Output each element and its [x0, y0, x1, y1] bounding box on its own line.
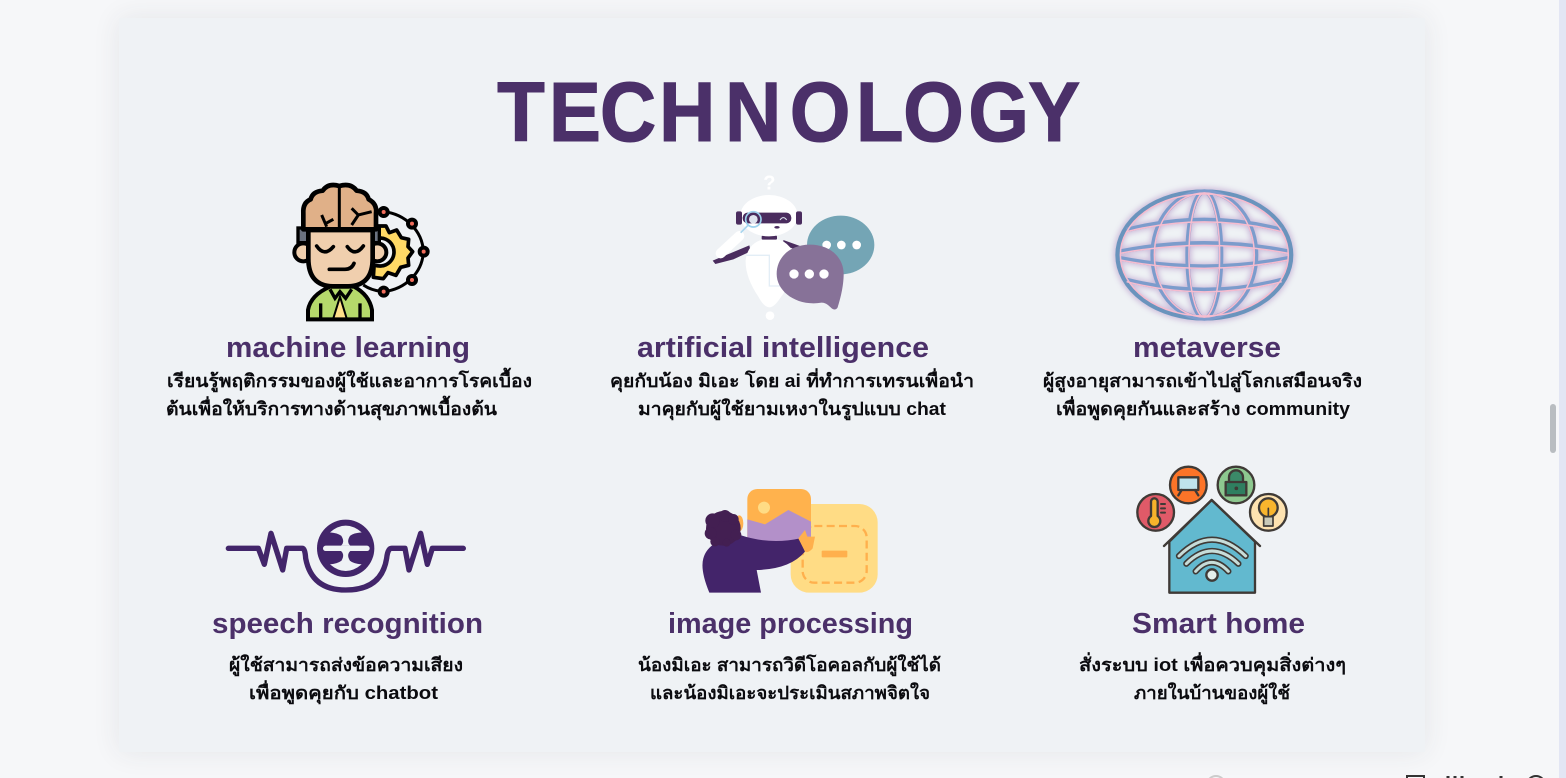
- description: smart home: สั่งระบบ iot เพื่อควบคุมสิ่งต่างๆ: [1079, 652, 1346, 677]
- heading: image processing: image processing: [668, 608, 913, 640]
- description: image processing: [638, 654, 941, 703]
- icon: smart home: [1137, 467, 1287, 593]
- icon: robot with chat bubbles: [713, 172, 874, 320]
- heading: machine learning: machine learning: [226, 332, 470, 364]
- description: smart home: [1079, 652, 1346, 705]
- heading: metaverse: metaverse: [1133, 332, 1281, 364]
- description: speech recognition: ผู้ใช้สามารถส่งข้อความเสียง: [229, 654, 463, 677]
- panel: technology card: [119, 18, 1425, 752]
- description: artificial intelligence: มาคุยกับผู้ใช้ยามเหงาในรูปแบบ chat: [638, 398, 946, 421]
- description: metaverse: ผู้สูงอายุสามารถเข้าไปสู่โลกเสมือนจริง: [1043, 370, 1362, 393]
- description: machine learning: ต้นเพื่อให้บริการทางด้านสุขภาพเบื้องต้น: [166, 395, 498, 421]
- description: speech recognition: [229, 654, 463, 705]
- title: TECHNOLOGY: [497, 66, 1080, 160]
- icon: metaverse wireframe globe: [1118, 192, 1291, 318]
- description: image processing: และน้องมิเอะจะประเมินสภาพจิตใจ: [650, 682, 930, 703]
- icon: speech waveform: [228, 520, 463, 590]
- description: smart home: ภายในบ้านของผู้ใช้: [1134, 682, 1290, 705]
- toolbar icons cropped at the bottom edge: [1207, 776, 1545, 778]
- description: metaverse: เพื่อพูดคุยกันและสร้าง community: [1056, 396, 1350, 421]
- scrollbar: [1550, 0, 1566, 778]
- description: metaverse: [1043, 370, 1362, 421]
- icon: robot with chat bubbles: ?: [763, 172, 775, 194]
- heading: speech recognition: speech recognition: [212, 608, 483, 640]
- description: machine learning: [166, 367, 532, 421]
- description: artificial intelligence: [610, 368, 974, 421]
- heading: smart home: Smart home: [1132, 608, 1305, 640]
- heading: artificial intelligence: artificial intelligence: [637, 332, 929, 364]
- icon: machine learning head with gear: [294, 185, 428, 319]
- description: speech recognition: เพื่อพูดคุยกับ chatbot: [249, 680, 438, 705]
- description: machine learning: เรียนรู้พฤติกรรมของผู้ใช้และอาการโรคเบื้อง: [167, 367, 532, 393]
- icon: person arranging images: [702, 489, 878, 593]
- description: artificial intelligence: คุยกับน้อง มิเอะ โดย ai ที่ทำการเทรนเพื่อนำ: [610, 368, 974, 393]
- description: image processing: น้องมิเอะ สามารถวิดีโอคอลกับผู้ใช้ได้: [638, 654, 941, 677]
